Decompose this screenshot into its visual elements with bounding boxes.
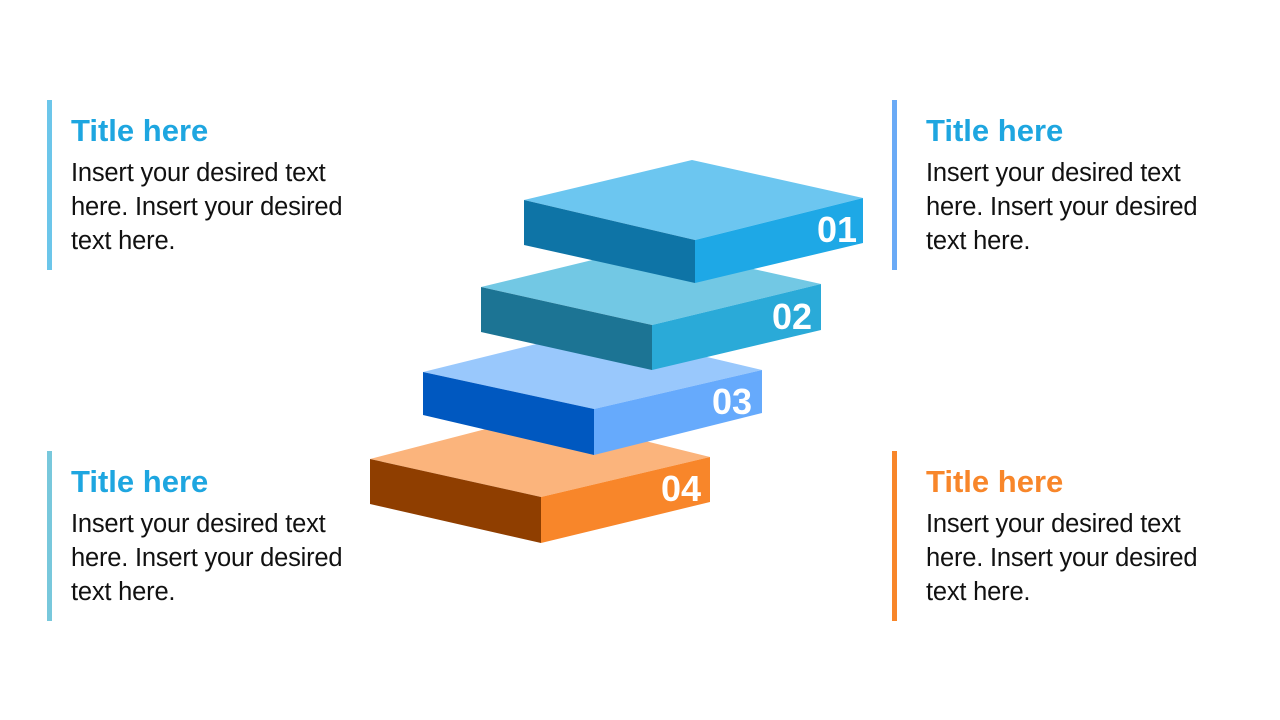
panel: bottom-right (892, 451, 1197, 621)
step 02: 02 (772, 296, 812, 337)
step 03: 03 (712, 381, 752, 422)
step 04 (370, 415, 710, 543)
heading: top-left: Title here (71, 113, 208, 148)
text block: bottom-left: Insert your desired text here. Insert your desired text here. (71, 510, 342, 606)
panel: top-left (47, 100, 342, 270)
step 03 (423, 330, 762, 455)
step 02 (481, 246, 821, 370)
text block: top-left: Insert your desired text here. Insert your desired text here. (71, 159, 342, 255)
heading: bottom-left: Title here (71, 464, 208, 499)
text block: bottom-right: Insert your desired text here. Insert your desired text here. (926, 510, 1197, 606)
text block: top-right: Insert your desired text here. Insert your desired text here. (926, 159, 1197, 255)
heading: bottom-right: Title here (926, 464, 1063, 499)
panel: bottom-left (47, 451, 342, 621)
panel: top-right (892, 100, 1197, 270)
step 01 (524, 160, 863, 283)
heading: top-right: Title here (926, 113, 1063, 148)
step 01: 01 (817, 209, 857, 250)
step 04: 04 (661, 468, 701, 509)
